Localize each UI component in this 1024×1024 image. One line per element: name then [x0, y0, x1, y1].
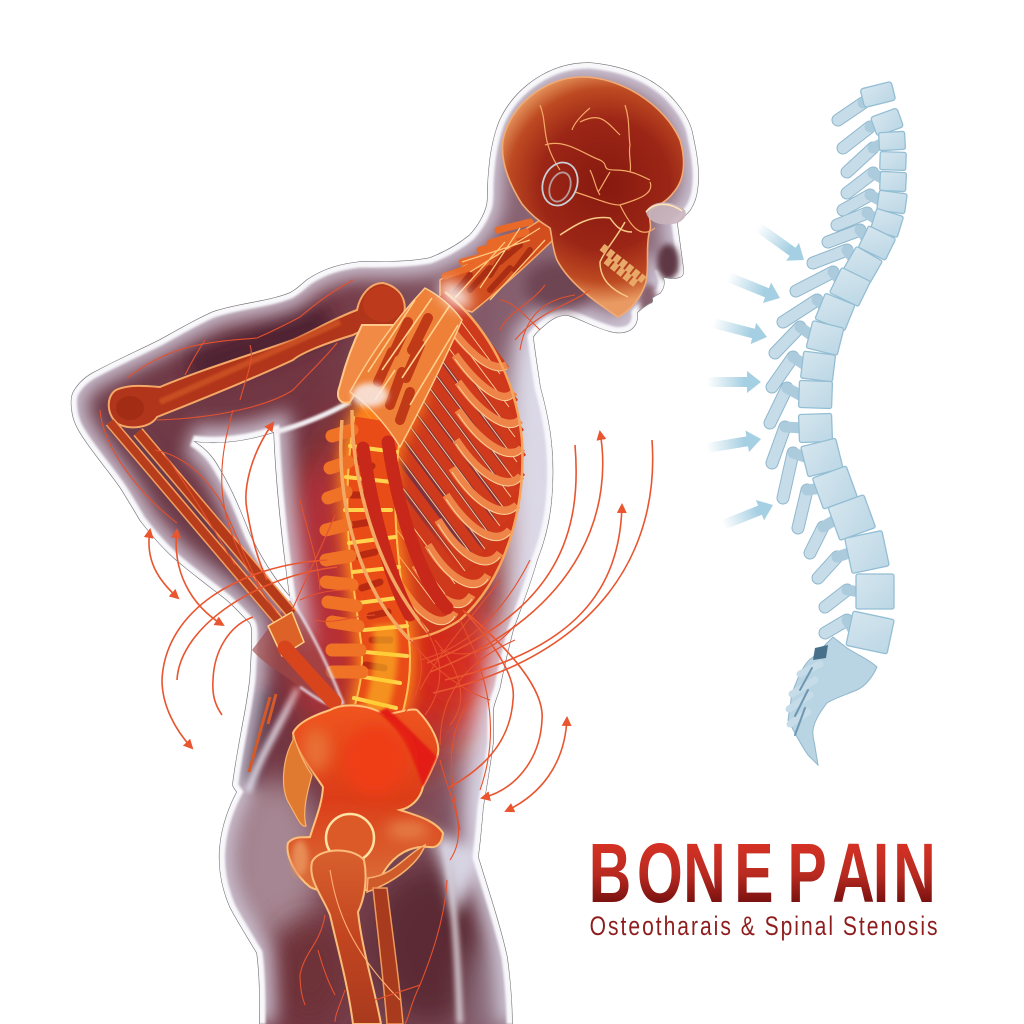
nerves	[100, 280, 590, 1024]
spine column	[326, 288, 462, 712]
shoulder glow	[352, 276, 475, 407]
jaw line	[560, 217, 632, 297]
title: BONE PAIN	[589, 827, 936, 921]
hand	[245, 690, 262, 785]
forearm lobe over torso	[252, 600, 343, 706]
pelvis	[284, 705, 443, 892]
teeth	[602, 247, 644, 284]
ribcage	[343, 292, 522, 640]
spinous processes	[770, 97, 885, 633]
pain arrows	[149, 423, 653, 811]
human figure	[70, 62, 699, 1024]
lateral processes	[326, 430, 362, 712]
neck vertebrae	[440, 215, 553, 312]
ear	[537, 158, 583, 210]
sacrum and coccyx	[788, 637, 877, 765]
hand bones	[285, 648, 334, 702]
diagonal rib strips	[358, 312, 522, 610]
infographic canvas	[70, 62, 937, 1024]
obturator ramus	[367, 845, 425, 892]
compression arrows	[706, 223, 804, 530]
skull	[502, 77, 686, 317]
vertebral bodies	[371, 420, 386, 712]
upper thoracic block	[350, 288, 462, 447]
body silhouette	[70, 62, 699, 1024]
blue spine illustration	[770, 81, 907, 765]
ribcage cavity	[400, 355, 506, 565]
scapula	[338, 325, 395, 403]
vertebral bodies	[799, 81, 907, 654]
wrist bones	[268, 612, 304, 656]
thigh crease	[445, 845, 460, 1024]
long posterior rib bands	[363, 442, 447, 615]
femur	[311, 850, 403, 1024]
face and neck shading	[657, 244, 679, 280]
humerus	[109, 283, 405, 427]
subtitle: Osteotharais & Spinal Stenosis	[590, 912, 938, 942]
eye socket	[646, 202, 686, 224]
front rib bands	[400, 330, 522, 621]
sacrum	[284, 733, 312, 826]
forearm bones	[110, 422, 343, 772]
skull cracks	[540, 105, 655, 232]
femoral head	[326, 814, 374, 862]
arm underside highlight	[275, 402, 350, 432]
